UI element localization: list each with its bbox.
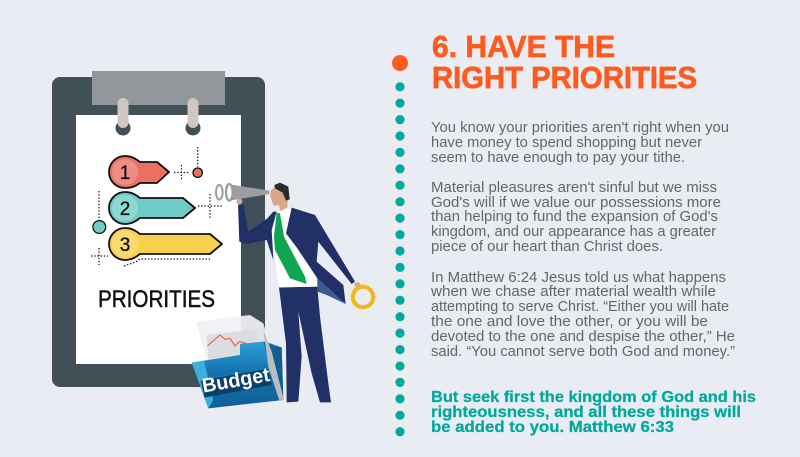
- priorities label: PRIORITIES: [98, 286, 215, 313]
- scripture callout: be added to you. Matthew 6:33: [431, 419, 674, 436]
- paragraph: Matthew 6:24: devoted to the one and despise the other,” He: [431, 329, 735, 345]
- clipboard illustration: [52, 71, 265, 387]
- budget folder: [192, 315, 284, 408]
- paragraph: material pleasures: Material pleasures aren't sinful but we miss: [431, 180, 717, 196]
- priorities key diagram: 2: [120, 199, 130, 220]
- paragraph: Matthew 6:24: the one and love the other, or you will be: [431, 314, 708, 330]
- scripture callout: [431, 389, 756, 436]
- paragraph: material pleasures: [431, 180, 721, 255]
- scripture callout: righteousness, and all these things will: [431, 404, 741, 421]
- priorities key diagram: [91, 147, 223, 266]
- title: 6. HAVE THE: [432, 29, 615, 64]
- paragraph: priorities: seem to have enough to pay your tithe.: [431, 150, 685, 166]
- paragraph: material pleasures: God's will if we value our possessions more: [431, 195, 721, 211]
- paragraph: Matthew 6:24: In Matthew 6:24 Jesus told us what happens: [431, 270, 726, 286]
- paragraph: material pleasures: kingdom, and our appearance has a greater: [431, 224, 716, 240]
- paragraph: priorities: have money to spend shopping but never: [431, 135, 702, 151]
- paragraph: priorities: [431, 120, 729, 166]
- title: [432, 29, 697, 95]
- paragraph: material pleasures: piece of our heart than Christ does.: [431, 239, 663, 255]
- businessman with binoculars: [216, 183, 375, 402]
- title: RIGHT PRIORITIES: [432, 60, 697, 95]
- paragraph: Matthew 6:24: when we chase after material wealth while: [430, 284, 716, 300]
- paragraph: Matthew 6:24: attempting to serve Christ. “Either you will hate: [431, 299, 729, 315]
- timeline dots: [392, 55, 408, 436]
- priorities key diagram: 1: [120, 163, 130, 184]
- paragraph: Matthew 6:24: [430, 270, 735, 360]
- scripture callout: But seek first the kingdom of God and his: [431, 389, 756, 406]
- paragraph: material pleasures: than helping to fund the expansion of God's: [431, 209, 718, 225]
- priorities key diagram: 3: [120, 235, 130, 256]
- budget folder: Budget: [200, 364, 272, 398]
- paragraph: Matthew 6:24: said. “You cannot serve both God and money.”: [431, 344, 735, 360]
- paragraph: priorities: You know your priorities aren't right when you: [431, 120, 729, 136]
